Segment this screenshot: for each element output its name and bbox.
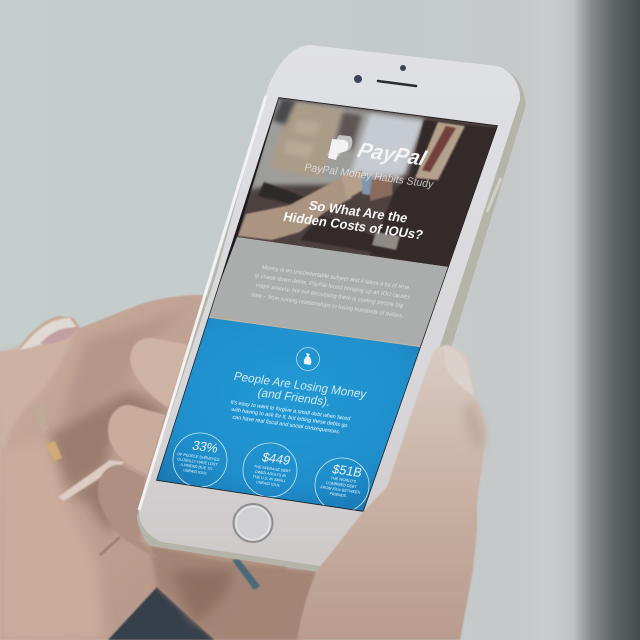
phone front face (139, 45, 520, 566)
lower palm highlight (0, 440, 105, 640)
thumb shading (465, 405, 484, 450)
fingernail (20, 318, 76, 350)
blurred pale strip (58, 460, 125, 501)
ring band (46, 441, 62, 461)
PayPal logo icon (327, 135, 352, 160)
section divider (207, 317, 423, 347)
front camera (354, 75, 362, 83)
watch strap knit (232, 559, 260, 590)
finger two (108, 405, 165, 474)
stat circle: 33%: A FRIEND DUE TO (180, 463, 213, 471)
section paragraph: It's easy to want to forgive a small debt when faced (230, 400, 351, 422)
stat circle: $449: THE U.S. IN SMALL (252, 475, 287, 483)
side switch (487, 178, 501, 212)
ring (35, 404, 49, 434)
metal side band (137, 68, 526, 572)
little finger (0, 325, 75, 450)
intro paragraph: time – from ruining relationships to losing hundreds of dollars. (250, 292, 405, 320)
header photo (237, 98, 500, 270)
stat circle: $449: THE AVERAGE DEBT (253, 465, 292, 474)
palm crease (100, 537, 120, 555)
section paragraph (229, 400, 351, 436)
gray intro section (207, 237, 450, 347)
shadow between fingers (50, 390, 170, 490)
section paragraph: with having to ask for it, but letting these debts go (229, 407, 348, 429)
intro paragraph: major anxiety, but not discussing them is costing people big (255, 283, 404, 309)
stat circle: 33% (173, 433, 227, 487)
back of hand shading (60, 310, 190, 425)
stat circle: $449 (243, 443, 297, 497)
blue section (157, 317, 423, 511)
intro paragraph: to chase down debts. PayPal found bringing up an IOU causes (254, 273, 411, 301)
intro paragraph: Money is an uncomfortable subject and it takes a lot of time (261, 265, 410, 291)
stat circle: 33%: GLOBALLY HAVE LOST (176, 457, 219, 467)
icon: money bag (296, 348, 320, 370)
stat circle: 33%: OF PEOPLE SURVEYED (177, 452, 220, 462)
stat circle: $51B: $51B (331, 461, 364, 480)
right hand thumb (297, 345, 485, 640)
stat circle: $51B: FRIENDS. (329, 492, 348, 498)
stat circle: $449: $449 (260, 449, 292, 468)
intro paragraph (250, 265, 411, 320)
stat circle: $51B: COMBINED DEBT (325, 481, 358, 489)
PayPal wordmark: PayPal (355, 139, 430, 171)
main title: So What Are the (307, 198, 410, 226)
thumb nail (444, 347, 474, 396)
stat circle: $51B (315, 458, 369, 512)
home button (234, 504, 272, 542)
phone (137, 45, 526, 572)
screen: infographic (157, 98, 500, 512)
speaker (378, 81, 416, 86)
main title: Hidden Costs of IOUs? (282, 209, 425, 242)
finger one (130, 338, 190, 408)
section paragraph: can have real fiscal and social consequences. (232, 415, 341, 436)
section heading: (and Friends). (256, 385, 332, 409)
sleeve (108, 587, 215, 640)
stat circle: $449: UNPAID IOUs. (256, 480, 281, 488)
section heading: People Are Losing Money (232, 369, 368, 401)
thumb mound shadow between phone and sleeve (150, 545, 318, 640)
study subtitle: PayPal Money Habits Study (303, 162, 436, 191)
stat circle: $51B: FROM IOUs BETWEEN (320, 485, 361, 495)
finger three (98, 465, 160, 560)
stat circle: $51B: THE WORLD'S (330, 476, 357, 484)
proximity sensor (400, 65, 406, 71)
stat circle: 33%: 33% (191, 438, 220, 456)
stat circle: 33%: UNPAID IOUs. (183, 468, 208, 476)
screen border (157, 98, 497, 511)
white left rim (139, 96, 266, 510)
stat circle: $449: OWED ADULTS IN (254, 470, 287, 478)
left hand (0, 295, 318, 640)
